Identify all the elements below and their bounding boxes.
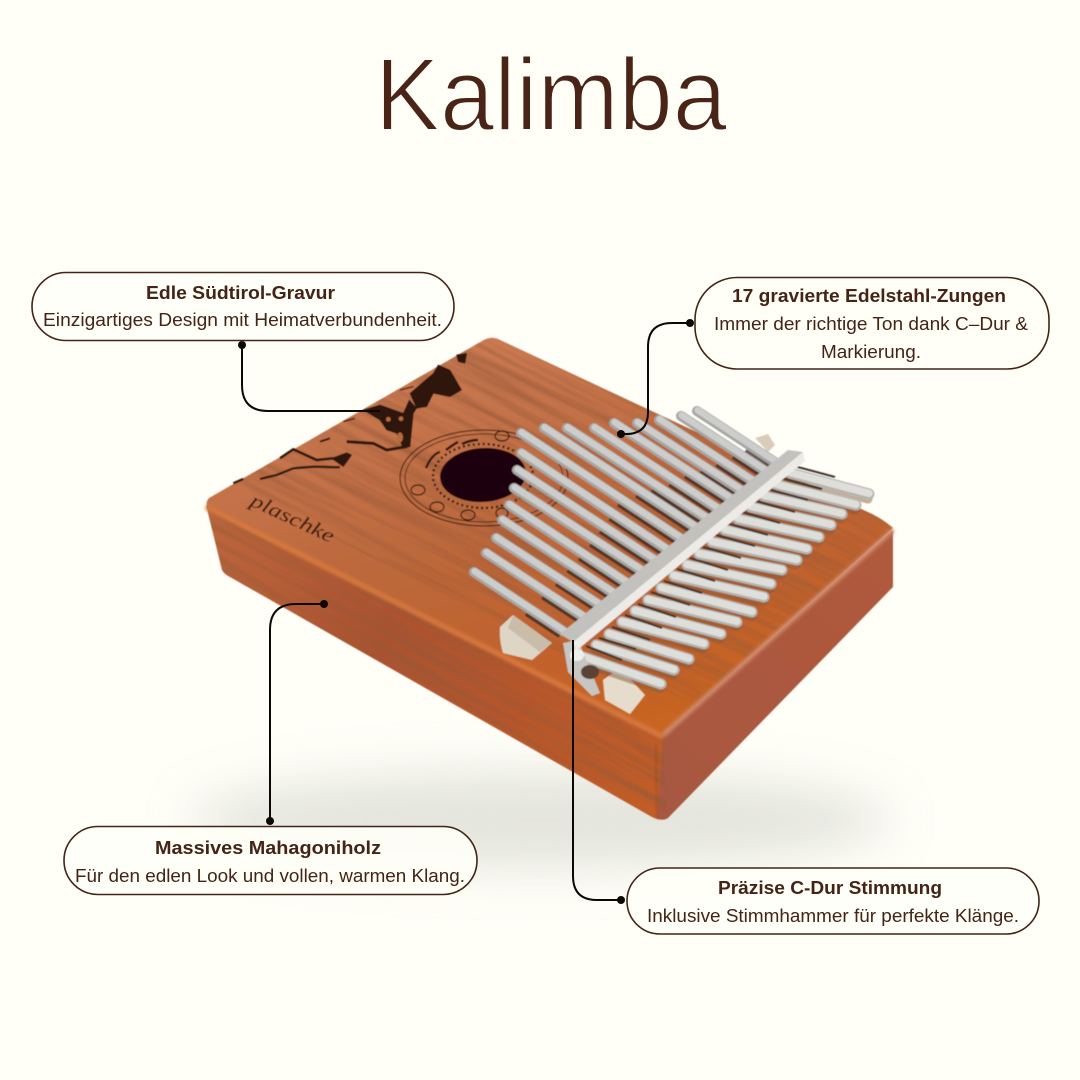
callout: Edle Südtirol-Gravur: Einzigartiges Design mit Heimatverbundenheit. [43,310,442,330]
brand name: plaschke [245,489,338,548]
lower tine bracket [563,640,600,696]
callout: Präzise C-Dur Stimmung: Inklusive Stimmhammer für perfekte Klänge. [647,906,1019,926]
callout: 17 gravierte Edelstahl-Zungen: Immer der richtige Ton dank C–Dur & [714,314,1028,334]
ground shadow [190,772,890,868]
connector: wood [266,600,328,825]
callout: Massives Mahagoniholz: Für den edlen Look und vollen, warmen Klang. [75,866,465,886]
callout: 17 gravierte Edelstahl-Zungen [695,278,1049,369]
metal tines behind bar [471,410,782,636]
title: Kalimba [375,37,728,152]
wooden bridge blocks [500,434,775,714]
metal bar [560,450,805,651]
callout: Präzise C-Dur Stimmung: Präzise C-Dur Stimmung [718,878,942,898]
connector: tuning [573,640,625,904]
kalimba illustration [202,337,896,821]
connector: tines [617,319,694,438]
wooden body [202,337,896,821]
connector: engraving [238,341,380,411]
callout: Edle Südtirol-Gravur [32,272,454,340]
callout: Massives Mahagoniholz [64,826,477,894]
mountain engraving [233,353,467,483]
metal tines in front of bar [582,466,869,689]
callout: 17 gravierte Edelstahl-Zungen: Markierung. [821,342,921,362]
callout: Edle Südtirol-Gravur: Edle Südtirol-Gravur [146,283,335,303]
sound hole rosette [400,430,568,526]
callout: 17 gravierte Edelstahl-Zungen: 17 gravierte Edelstahl-Zungen [732,286,1006,306]
callout: Massives Mahagoniholz: Massives Mahagoniholz [155,838,381,858]
callout: Präzise C-Dur Stimmung [627,868,1039,934]
sound hole [438,445,528,505]
